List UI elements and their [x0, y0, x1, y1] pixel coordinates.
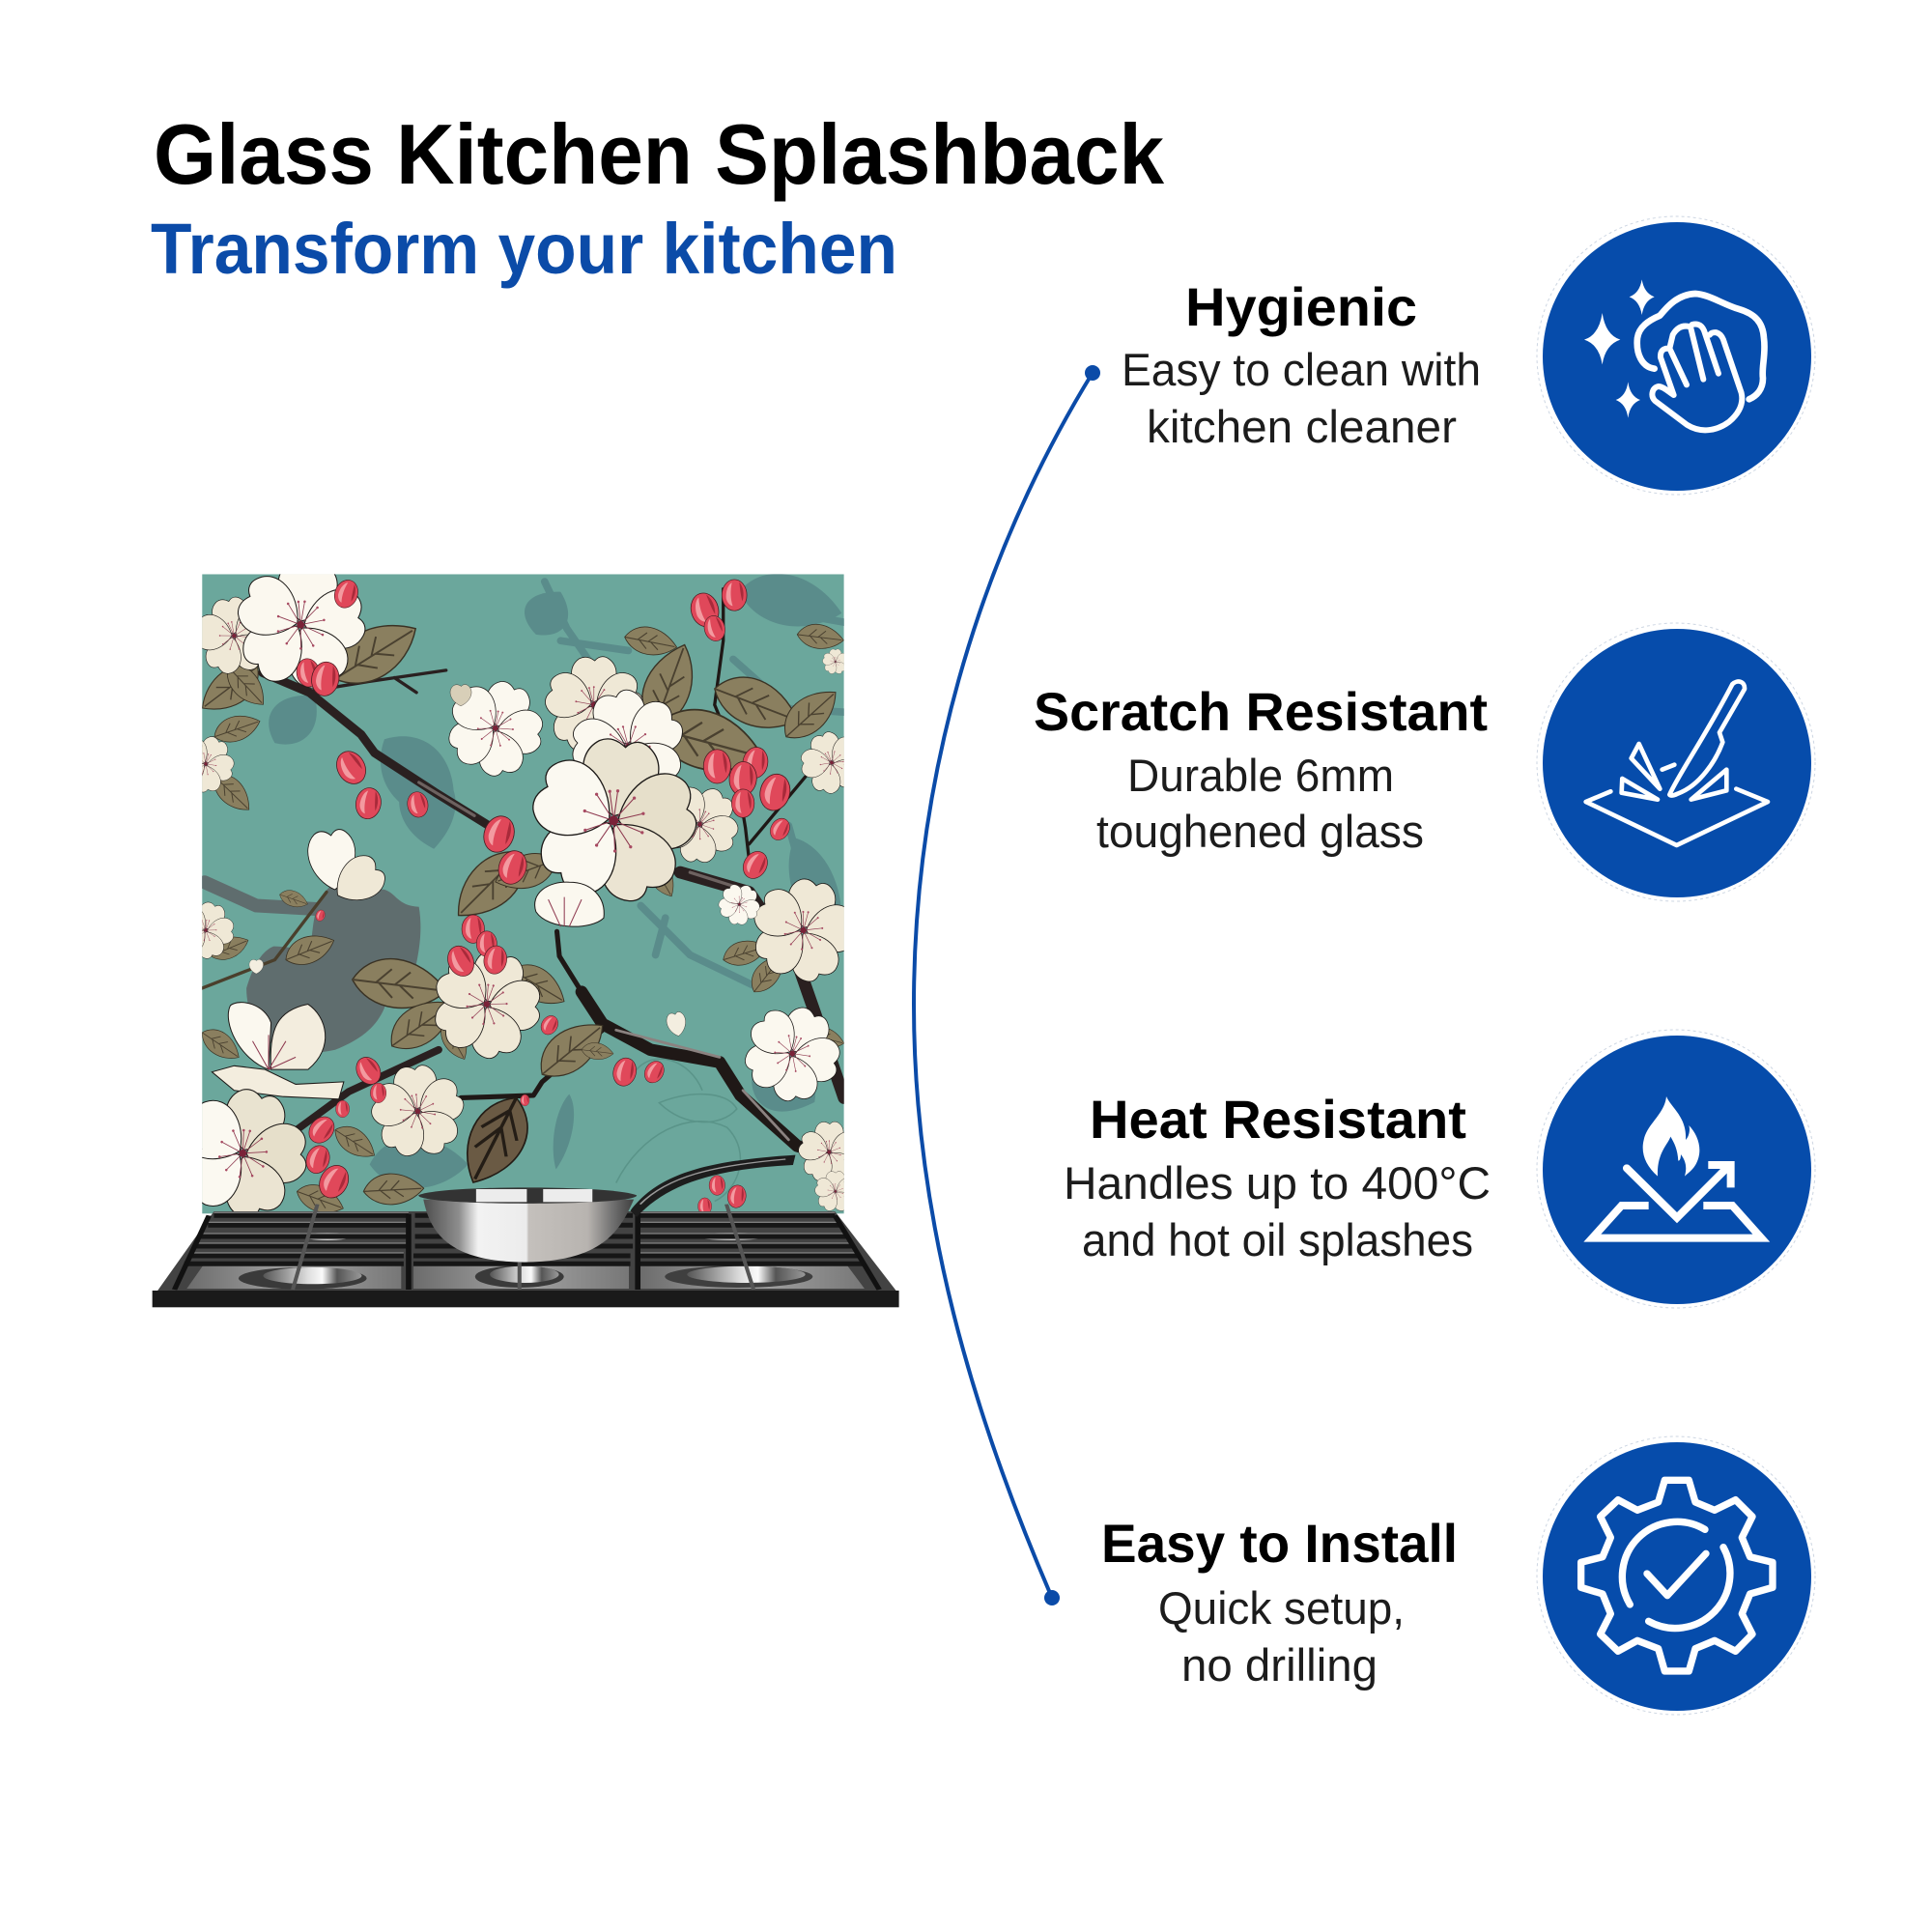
red buds [295, 577, 794, 1215]
burner trays [186, 1265, 865, 1289]
teal panel background [202, 574, 844, 1213]
title: Glass Kitchen Splashback [154, 106, 1165, 202]
icon: hand wiping with sparkles [1537, 216, 1815, 495]
benefit text: heat resistant: and hot oil splashes [1082, 1214, 1473, 1265]
benefit text: scratch resistant: Scratch Resistant [1034, 681, 1488, 742]
branches [202, 589, 844, 1153]
pan rim [418, 1187, 637, 1204]
blossom: wide two-petal flower [212, 1003, 344, 1099]
benefit text: hygienic: Hygienic [1185, 276, 1417, 337]
benefit text: hygienic: kitchen cleaner [1147, 401, 1457, 452]
connector arc [914, 365, 1100, 1605]
pan handle [631, 1155, 795, 1217]
benefit text: scratch resistant: Durable 6mm [1127, 750, 1394, 801]
blossom: round half-open flower [535, 882, 604, 926]
benefit text: easy to install: Quick setup, [1158, 1582, 1405, 1634]
benefit text: heat resistant [1064, 1089, 1491, 1265]
icon: gear with check mark [1537, 1436, 1815, 1715]
gas hob with pan [153, 1155, 899, 1307]
burners [239, 1233, 812, 1290]
subtitle: Transform your kitchen [151, 209, 897, 289]
pan body [423, 1200, 634, 1263]
product image: floral glass splashback [202, 574, 844, 1213]
leaves [192, 607, 846, 1219]
benefit text: scratch resistant [1034, 681, 1488, 857]
benefit text: heat resistant: Handles up to 400°C [1064, 1157, 1491, 1208]
benefit text: easy to install [1101, 1513, 1458, 1690]
hob top surface [157, 1211, 896, 1292]
front edge [153, 1291, 899, 1307]
cast iron grates [175, 1205, 879, 1290]
benefit text: easy to install: no drilling [1181, 1639, 1378, 1690]
benefit text: easy to install: Easy to Install [1101, 1513, 1458, 1574]
infographic canvas [151, 122, 1816, 1716]
benefit text: hygienic [1122, 276, 1481, 452]
shadows on the glass [205, 565, 859, 1202]
icon: knife on glass [1537, 623, 1815, 901]
blossoms [202, 574, 844, 1211]
benefit text: scratch resistant: toughened glass [1096, 806, 1424, 857]
benefit text: hygienic: Easy to clean with [1122, 344, 1481, 395]
benefit text: heat resistant: Heat Resistant [1090, 1089, 1466, 1150]
icon: flame and heat arrow [1537, 1030, 1815, 1308]
